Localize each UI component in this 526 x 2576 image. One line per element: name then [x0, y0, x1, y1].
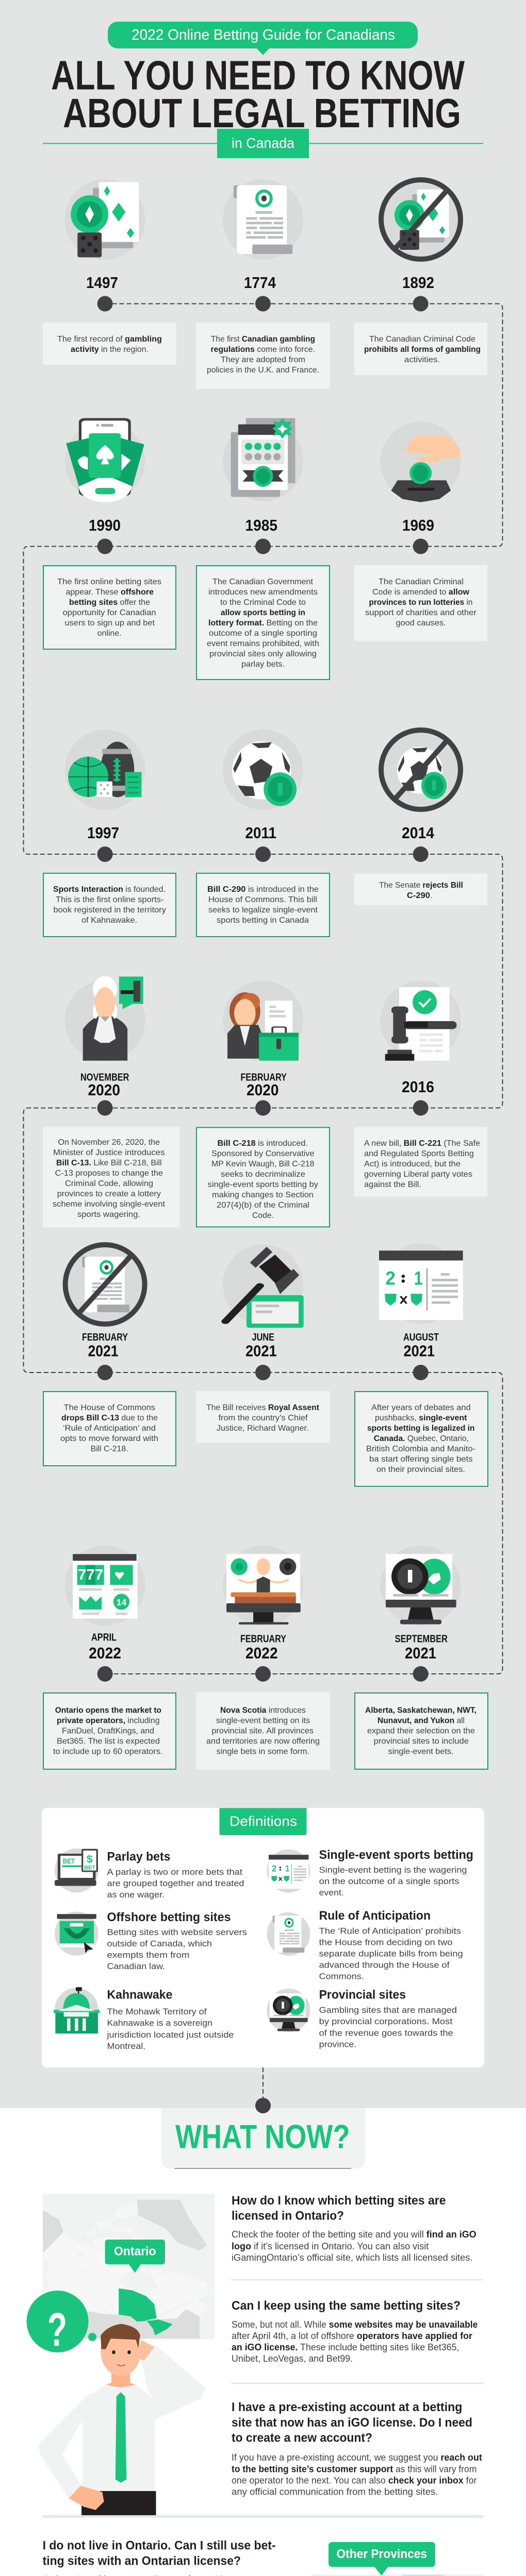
card: prohibits all forms of gambling: [364, 345, 481, 354]
card: ‘Rule of Anticipation’ and: [63, 1424, 156, 1433]
year: 1497: [86, 274, 118, 292]
card: support of charities and other: [365, 608, 477, 617]
icon: chip cards dice: [65, 179, 145, 260]
card: The Bill receives Royal Assent: [206, 1403, 320, 1412]
term and text: Provincial sites: [319, 1988, 406, 2002]
card: against the Bill.: [364, 1180, 421, 1189]
year: 2014: [402, 824, 435, 842]
card: [43, 1693, 176, 1769]
map: Ontario highlighted: [34, 2194, 220, 2339]
faq: licensed sites: Check the footer of the betting site and you will find an iGO: [232, 2229, 476, 2240]
card: The House of Commons: [64, 1403, 155, 1412]
card: single bets in some form.: [217, 1748, 309, 1756]
timeline 2016: [354, 980, 487, 1196]
label bubble: Ontario: Ontario: [114, 2245, 156, 2259]
card: drops Bill C-13 due to the: [61, 1414, 158, 1422]
card: book registered in the territory: [54, 906, 166, 914]
card: After years of debates and: [371, 1403, 471, 1412]
icon: scroll: [223, 179, 303, 260]
term and text: event.: [319, 1888, 344, 1897]
card: provincial sites to include: [374, 1737, 469, 1745]
icon: laptop and phone: BET: [63, 1857, 75, 1865]
month and year: 2021: [245, 1342, 277, 1360]
timeline August 2021: [355, 1244, 488, 1486]
month and year: NOVEMBER: [80, 1072, 129, 1083]
timeline 1497: [43, 179, 176, 365]
term and text: Offshore betting sites: [107, 1910, 231, 1924]
month and year: APRIL: [91, 1632, 117, 1643]
term and text: [106, 1988, 234, 2051]
icon: betting site grid: [65, 1546, 145, 1626]
card: provincial sites only allowing: [209, 650, 317, 658]
card: from the country’s Chief: [219, 1414, 308, 1422]
timeline February 2021: [43, 1245, 176, 1466]
card: on their provincial sites.: [376, 1465, 465, 1474]
icon: monitor with chips: [381, 1546, 461, 1626]
term and text: The Mohawk Territory of: [107, 2007, 207, 2016]
year: 1774: [244, 274, 276, 292]
month and year: 2022: [89, 1644, 121, 1662]
year: 1985: [245, 516, 277, 534]
faq: licensed sites: logo if it’s licensed in Ontario. You can also visit: [232, 2241, 429, 2251]
term and text: jurisdiction located just outside: [106, 2030, 234, 2040]
icon: laptop and phone: $: [87, 1853, 93, 1865]
icon: score screen: [267, 1850, 310, 1893]
timeline November 2020: [43, 976, 179, 1227]
card: The first online betting sites: [57, 578, 161, 586]
timeline February 2020: [196, 980, 330, 1227]
title: [51, 53, 465, 136]
timeline 1990: [43, 418, 176, 649]
card: [196, 1127, 330, 1227]
term and text: [319, 1988, 457, 2049]
card: sports wagering.: [77, 1210, 140, 1219]
month and year: FEBRUARY: [240, 1072, 287, 1083]
card: Act) is introduced, but the: [364, 1160, 461, 1168]
heading: what now: [161, 2098, 365, 2168]
card: provinces to run lotteries in: [369, 598, 472, 607]
faq: same betting sites: after April 4th, a lot of offshore operators have applied for: [232, 2331, 472, 2341]
timeline September 2021: [355, 1546, 488, 1769]
card: outcome of a single sporting: [209, 629, 317, 638]
card: The first record of gambling: [57, 335, 162, 344]
timeline dots: [97, 296, 429, 1682]
card: They are adopted from: [221, 355, 305, 364]
month and year: [395, 1633, 448, 1662]
faq: pre-existing account: to create a new account?: [232, 2431, 372, 2445]
icon: gavel and document: [381, 980, 461, 1061]
card: activity in the region.: [71, 345, 149, 354]
card: users to sign up and bet: [65, 619, 155, 628]
card: [43, 323, 176, 365]
term and text: Single-event betting is the wagering: [319, 1865, 467, 1875]
card: appear. These offshore: [66, 588, 154, 597]
term and text: of the revenue goes towards the: [319, 2028, 453, 2038]
card: Bill C-290 is introduced in the: [207, 885, 319, 894]
card: House of Commons. This bill: [208, 895, 317, 904]
card: seeks to decriminalize: [221, 1170, 305, 1179]
card: parlay bets.: [241, 660, 285, 669]
term and text: exempts them from: [107, 1950, 190, 1960]
card: sports betting in Canada: [217, 916, 309, 925]
icon: laptop and phone: BET: [84, 1865, 95, 1871]
year: 1969: [402, 516, 434, 534]
year: 1892: [402, 274, 434, 292]
card: activities.: [404, 355, 440, 364]
card: [354, 874, 487, 905]
definition: offshore: [55, 1910, 247, 1971]
card: 207(4)(b) of the Criminal: [217, 1201, 309, 1210]
timeline 1985: [196, 418, 330, 680]
definition: parlay bets: [55, 1849, 244, 1900]
term and text: Montreal.: [107, 2041, 145, 2051]
month and year: 2021: [88, 1342, 119, 1360]
year: 2016: [402, 1078, 434, 1096]
card: making changes to Section: [212, 1191, 314, 1199]
month and year: [240, 1072, 287, 1099]
card: Justice, Richard Wagner.: [217, 1424, 308, 1433]
card: [196, 323, 330, 389]
icon: lottery slip: [223, 418, 303, 501]
card: Sports Interaction is founded.: [53, 885, 166, 894]
timeline June 2021: [196, 1245, 330, 1443]
faq: pre-existing account: [232, 2400, 482, 2497]
in Canada tag with rule: in Canada: [232, 135, 294, 151]
icon: scroll: [267, 1912, 310, 1956]
card: lottery format. Betting on the: [208, 619, 318, 628]
card: Sponsored by Conservative: [211, 1149, 315, 1158]
card: online.: [97, 629, 122, 638]
year: 2011: [245, 824, 276, 842]
icon: live dealer monitor: [223, 1546, 303, 1626]
faq: pre-existing account: If you have a pre-existing account, we suggest you reach out: [232, 2452, 482, 2463]
card: Nova Scotia introduces: [220, 1706, 306, 1715]
month and year: FEBRUARY: [82, 1332, 128, 1343]
thought bubble with question mark: [27, 2291, 96, 2356]
icon: browser roulette: [55, 1911, 98, 1956]
icon: judge: [65, 976, 145, 1061]
term and text: The ‘Rule of Anticipation’ prohibits: [319, 1926, 461, 1936]
card: introduces new amendments: [208, 588, 318, 597]
thought bubble with question mark: ?: [47, 2303, 67, 2356]
card: [196, 566, 330, 680]
card: [354, 323, 487, 375]
timeline 1774: [196, 179, 330, 389]
card: [355, 1392, 488, 1486]
term and text: the House from deciding on two: [319, 1937, 453, 1947]
card: MP Kevin Waugh, Bill C-218: [211, 1160, 315, 1168]
in Canada tag with rule: [43, 129, 483, 158]
icon: banned soccer ball: [381, 730, 461, 809]
card: On November 26, 2020, the: [58, 1138, 160, 1147]
year: 1990: [89, 516, 121, 534]
faq: not in Ontario: I do not live in Ontario. Can I still use bet-: [43, 2539, 276, 2553]
definition: single-event: [267, 1848, 473, 1897]
card: pushbacks, single-event: [375, 1414, 467, 1422]
month and year: [82, 1332, 128, 1360]
card: [43, 1392, 176, 1466]
card: The Canadian Government: [212, 578, 314, 586]
icon: lawyer: [223, 980, 303, 1061]
card: The Senate rejects Bill: [379, 881, 463, 890]
label bubble: Ontario: [105, 2240, 165, 2273]
card: [43, 873, 176, 937]
card: [354, 565, 487, 641]
term and text: Commons.: [319, 1972, 364, 1981]
definitions tab: Definitions: [229, 1814, 297, 1829]
timeline 2014: [354, 730, 487, 905]
faq: pre-existing account: to the betting site’s customer support as this will vary from: [232, 2464, 476, 2474]
card: The Canadian Criminal: [379, 578, 464, 586]
faq: pre-existing account: any official communication from the betting sites.: [232, 2486, 438, 2497]
card: event remains prohibited, with: [207, 639, 319, 648]
definitions tab: [220, 1808, 306, 1835]
faq: same betting sites: an iGO license. These include betting sites like Bet365,: [232, 2342, 459, 2352]
term and text: as one wager.: [107, 1890, 165, 1900]
term and text: province.: [319, 2039, 357, 2049]
connector to what now: [262, 2067, 264, 2099]
faq: not in Ontario: [42, 2539, 279, 2576]
month and year: 2021: [405, 1644, 436, 1662]
card: ba start offering single bets: [369, 1455, 473, 1464]
card: governing Liberal party votes: [364, 1170, 472, 1179]
card: Alberta, Saskatchewan, NWT,: [365, 1706, 476, 1715]
term and text: Canadian law.: [107, 1961, 165, 1971]
month and year: SEPTEMBER: [395, 1633, 448, 1645]
card: [196, 1391, 330, 1443]
card: [354, 1127, 487, 1196]
faq: pre-existing account: one operator to the next. You can also check your inbox for: [232, 2475, 476, 2485]
month and year: AUGUST: [403, 1332, 439, 1343]
month and year: [89, 1632, 121, 1662]
faq: pre-existing account: I have a pre-existing account at a betting: [232, 2400, 462, 2414]
icon: betting site grid: 777: [78, 1567, 103, 1583]
card: [355, 1693, 488, 1769]
term and text: Single-event sports betting: [319, 1848, 473, 1862]
card: Code.: [252, 1211, 274, 1220]
card: Bill C-13. Like Bill C-218, Bill: [56, 1159, 162, 1167]
label bubble: other provinces: Other Provinces: [336, 2547, 427, 2561]
icon: laptop and phone: [55, 1849, 98, 1893]
card: single-event betting on its: [216, 1717, 310, 1725]
timeline 2011: [196, 730, 330, 937]
month and year: 2020: [246, 1081, 278, 1099]
definition: rule of anticipation: [267, 1909, 463, 1981]
term and text: outside of Canada, which: [107, 1939, 212, 1948]
faq: same betting sites: Can I keep using the same betting sites?: [232, 2299, 461, 2313]
faq: same betting sites: Unibet, LeoVegas, and Bet99.: [232, 2353, 353, 2364]
card: FanDuel, DraftKings, and: [62, 1727, 154, 1735]
card: Minister of Justice introduces: [53, 1148, 165, 1157]
month and year: [403, 1332, 439, 1360]
month and year: 2021: [403, 1342, 435, 1360]
card: and territories are now offering: [206, 1737, 320, 1745]
faq: licensed sites: licensed in Ontario?: [232, 2209, 344, 2223]
subtitle speech bubble: [108, 22, 418, 55]
term and text: advanced through the House of: [319, 1960, 450, 1970]
section background: what now: [0, 2108, 526, 2576]
term and text: by provincial corporations. Most: [319, 2016, 453, 2026]
card: A new bill, Bill C-221 (The Safe: [364, 1139, 480, 1148]
card: provinces to create a lottery: [57, 1190, 161, 1198]
faq: licensed sites: How do I know which betting sites are: [232, 2194, 446, 2208]
timeline 1892: [354, 180, 487, 375]
term and text: Kahnawake is a sovereign: [107, 2018, 212, 2028]
header: [43, 22, 483, 158]
icon: soccer ball and coin: [223, 730, 303, 810]
term and text: Kahnawake: [107, 1988, 172, 2002]
card: [43, 566, 176, 649]
card: allow sports betting in: [221, 608, 305, 617]
card: seeks to legalize single-event: [208, 906, 318, 914]
card: regulations come into force.: [210, 345, 315, 354]
icon: phone with cards: [65, 418, 145, 502]
month and year: [80, 1072, 129, 1099]
card: British Colombia and Manito-: [366, 1445, 475, 1453]
card: Nunavut, and Yukon all: [377, 1717, 465, 1725]
term and text: on the outcome of a single sports: [319, 1876, 459, 1886]
card: expand their selection on the: [367, 1727, 475, 1735]
faq: same betting sites: Some, but not all. While some websites may be unavailable: [232, 2319, 478, 2330]
card: Code is amended to allow: [372, 588, 470, 597]
icon: monitor with chips: [267, 1989, 310, 2032]
card: private operators, including: [57, 1717, 160, 1725]
card: and Regulated Sports Betting: [364, 1149, 474, 1158]
timeline February 2022: [196, 1546, 330, 1770]
term and text: [319, 1848, 473, 1897]
card: betting sites offer the: [69, 598, 150, 607]
card: The Canadian Criminal Code: [369, 335, 475, 344]
card: The first Canadian gambling: [211, 335, 315, 344]
card: Criminal Code, allowing: [65, 1179, 153, 1188]
term and text: Betting sites with website servers: [107, 1927, 247, 1937]
month and year: 2022: [245, 1644, 278, 1662]
definition: kahnawake: [54, 1987, 234, 2051]
icon: parliament building: [54, 1987, 100, 2033]
term and text: Gambling sites that are managed: [319, 2005, 457, 2015]
icon: banned scroll: [65, 1245, 145, 1324]
card: Bill C-218.: [91, 1445, 128, 1453]
card: Canada. Quebec, Ontario,: [374, 1434, 469, 1443]
card: Bet365. The list is expected: [57, 1737, 160, 1745]
faq: licensed sites: [232, 2194, 476, 2263]
illustration: thinking man: [39, 2324, 205, 2517]
term and text: separate duplicate bills from being: [319, 1949, 463, 1959]
faq: pre-existing account: site that now has an iGO license. Do I need: [232, 2416, 472, 2430]
card: of Kahnawake.: [81, 916, 137, 925]
heading: what now: WHAT NOW?: [175, 2117, 350, 2156]
card: provincial site. All provinces: [211, 1727, 314, 1735]
timeline dashed connector: [24, 304, 502, 1674]
timeline 1969: [354, 421, 487, 641]
map: other provinces: [308, 2542, 483, 2576]
icon: score screen: [379, 1244, 463, 1324]
term and text: Parlay bets: [107, 1850, 170, 1864]
card: sports betting is legalized in: [367, 1424, 474, 1433]
card: single-event sports betting by: [208, 1180, 318, 1189]
icon: gavel on book: [223, 1245, 304, 1328]
month and year: FEBRUARY: [240, 1633, 287, 1645]
icon: coin into box: [381, 421, 461, 502]
icon: banned gambling: [381, 180, 461, 259]
month and year: [240, 1633, 287, 1662]
card: [196, 873, 330, 937]
card: [196, 1692, 330, 1770]
subtitle speech bubble: 2022 Online Betting Guide for Canadians: [132, 27, 395, 43]
timeline April 2022: [43, 1546, 176, 1769]
month and year: 2020: [88, 1081, 120, 1099]
card: This is the first online sports-: [56, 895, 164, 904]
card: good causes.: [396, 619, 446, 628]
card: opportunity for Canadian: [63, 608, 156, 617]
term and text: [107, 1850, 244, 1900]
year: 1997: [87, 824, 119, 842]
icon: sports balls: [65, 730, 145, 810]
card: to the Criminal Code to: [220, 598, 306, 607]
label bubble: other provinces: [328, 2542, 435, 2575]
term and text: [107, 1910, 247, 1971]
card: Bill C-218 is introduced.: [218, 1139, 308, 1148]
card: [43, 1127, 179, 1227]
icon: betting site grid: 14: [117, 1597, 127, 1607]
definition: provincial sites: [267, 1988, 457, 2049]
card: C-290.: [407, 891, 432, 900]
card: to include up to 60 operators.: [53, 1748, 163, 1756]
card: Ontario opens the market to: [55, 1706, 161, 1715]
faq: not in Ontario: ting sites with an Ontarian license?: [43, 2554, 241, 2568]
term and text: A parlay is two or more bets that: [107, 1867, 242, 1877]
card: scheme involving single-event: [53, 1200, 166, 1209]
term and text: [319, 1909, 463, 1981]
card: opts to move forward with: [60, 1434, 158, 1443]
faq: same betting sites: [232, 2299, 478, 2364]
card: C-13 proposes to change the: [55, 1169, 163, 1178]
term and text: Rule of Anticipation: [319, 1909, 431, 1923]
month and year: JUNE: [252, 1332, 274, 1343]
card: policies in the U.K. and France.: [207, 366, 319, 375]
card: single-event bets.: [388, 1748, 454, 1756]
faq: licensed sites: iGamingOntario’s official site, which lists all licensed sites.: [232, 2252, 472, 2263]
month and year: [245, 1332, 277, 1360]
timeline 1997: [43, 730, 176, 937]
term and text: are grouped together and treated: [107, 1878, 244, 1888]
panel: definitions: [42, 1808, 484, 2067]
